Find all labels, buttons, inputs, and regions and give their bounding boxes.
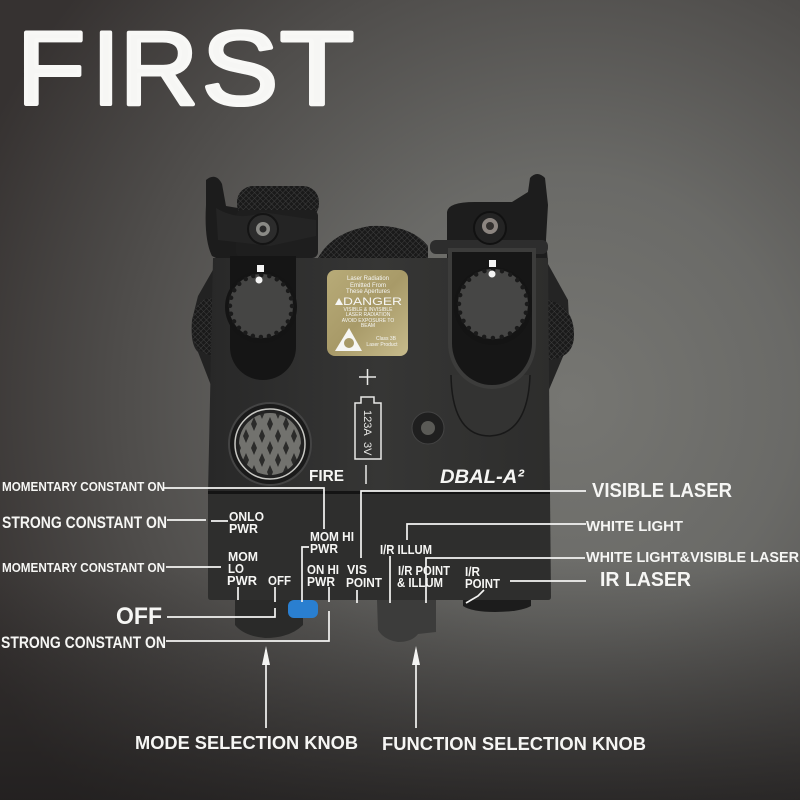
left callout: off: OFF [116,603,162,630]
device: laser unit [192,174,574,642]
ON HI PWR: ON HI [307,562,339,577]
danger plate: LASER RADIATION [346,312,391,318]
right rotary knob [454,260,532,345]
MOM HI PWR: MOM HI [310,529,354,544]
battery polarity marking [355,369,381,484]
switch position labels on device: PWR [310,541,339,556]
danger plate: BEAM [361,323,375,329]
switch position labels on device: PWR [227,573,258,588]
danger plate: Laser Radiation [347,276,389,282]
left knob recess [230,256,296,380]
switch position labels on device [227,509,500,591]
MOM LO PWR: MOM [228,549,258,564]
right callout: visible laser: VISIBLE LASER [592,480,733,502]
main body upper [208,258,550,493]
right callout: white light: WHITE LIGHT [586,518,683,535]
left callout: momentary constant on (top): MOMENTARY CONSTANT ON [2,480,165,494]
switch position labels on device: PWR [307,574,336,589]
title: FIRST brand: R [120,11,198,127]
danger plate [327,270,408,356]
ON LO PWR: ONLO [229,509,264,524]
switch position labels on device: & ILLUM [397,575,443,590]
callout leader lines [164,488,586,728]
right callout: IR laser: IR LASER [600,568,691,591]
danger plate: Class 3B [376,336,397,342]
switch position labels on device: POINT [346,575,382,590]
arrow: mode selection knob [262,646,270,665]
switch position labels on device: LO [228,561,244,576]
title: FIRST brand: T [280,11,354,127]
danger plate: These Apertures [346,289,390,295]
small screw [412,412,444,444]
danger plate: VISIBLE & INVISIBLE [344,307,393,313]
title: FIRST brand: S [202,11,278,127]
battery polarity marking: 123A [361,410,373,436]
right mounting bracket [430,174,548,262]
lower body [208,493,551,600]
OFF: OFF [268,573,291,588]
center rear knob [318,226,428,258]
title: FIRST brand: F [17,11,85,127]
blue set screw [288,600,318,618]
switch position labels on device: POINT [465,576,500,591]
IR point knob base [463,600,531,612]
left callout: strong constant on (top): STRONG CONSTANT ON [2,513,167,532]
danger plate: DANGER [343,296,402,308]
left mounting bracket and top knob [206,177,319,262]
switch position labels on device: PWR [229,521,259,536]
label: function selection knob: FUNCTION SELECTION KNOB [382,734,646,754]
I/R POINT & ILLUM: I/R POINT [398,563,450,578]
title: FIRST brand [17,11,354,127]
function selection knob body [377,600,436,642]
danger plate: Emitted From [350,283,386,289]
FIRE label: FIRE [309,468,344,485]
mode selection knob body [235,600,303,638]
DBAL-A2 model name: DBAL-A² [440,467,525,488]
arrow: function selection knob [412,646,420,665]
left callout: strong constant on (bottom): STRONG CONSTANT ON [1,633,166,652]
danger plate: AVOID EXPOSURE TO [342,318,394,324]
battery door outline [451,375,530,436]
VIS POINT: VIS [347,562,367,577]
right knob recess [450,250,534,387]
side knurled grips [192,264,574,392]
left rotary knob [225,265,297,343]
I/R POINT: I/R [465,564,481,579]
label: mode selection knob: MODE SELECTION KNOB [135,733,358,753]
battery polarity marking: 3V [361,442,373,456]
danger plate: Laser Product [366,342,398,348]
title: FIRST brand: I [93,11,119,127]
fire button [229,403,311,485]
I/R ILLUM: I/R ILLUM [380,542,432,557]
left callout: momentary constant on (middle): MOMENTARY CONSTANT ON [2,561,165,575]
